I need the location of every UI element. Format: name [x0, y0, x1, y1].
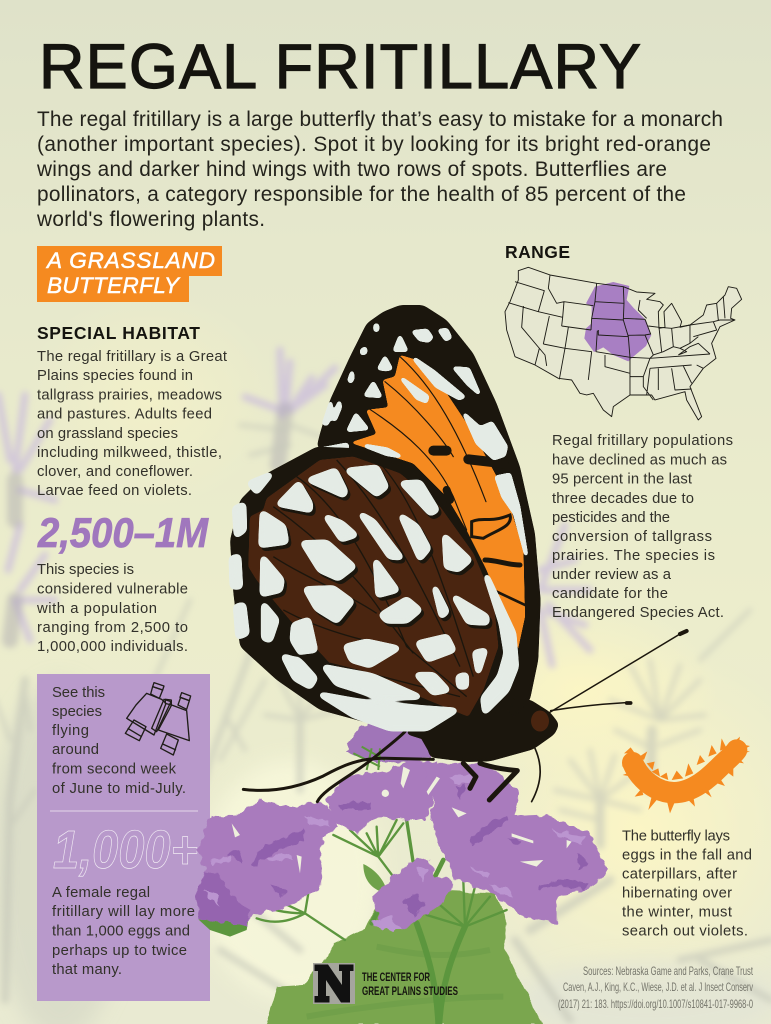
caterpillar text: [622, 828, 752, 940]
population text: This species is: [37, 562, 134, 578]
range decline text: candidate for the: [552, 586, 668, 602]
text: see this species: around: [52, 742, 99, 758]
flower: centre cluster: [327, 760, 437, 833]
hindwing veins: [273, 460, 473, 697]
caterpillar text: search out violets.: [622, 924, 748, 940]
map: US range: [505, 267, 742, 420]
heading: a grassland butterfly: A GRASSLAND: [45, 248, 215, 273]
leaf: [266, 892, 543, 1024]
range decline text: Regal fritillary populations: [552, 433, 733, 449]
icon: caterpillar: [622, 737, 750, 813]
butterfly eye: [531, 710, 549, 732]
special habitat text block: on grassland species: [37, 426, 178, 442]
special habitat text block: tallgrass prairies, meadows: [37, 388, 222, 404]
range decline text: 95 percent in the last: [552, 472, 692, 488]
intro text: The regal fritillary is a large butterfly that’s easy to mistake for a monarch: [37, 108, 723, 131]
flower: left cluster: [195, 800, 338, 925]
population text: 1,000,000 individuals.: [37, 639, 188, 655]
icon: binoculars: [125, 683, 191, 755]
text: female eggs: [52, 885, 195, 978]
text: female eggs: fritillary will lay more: [52, 904, 195, 920]
range decline text: have declined as much as: [552, 452, 727, 468]
butterfly body: [403, 699, 559, 762]
panel: sighting and eggs: [37, 674, 210, 1001]
stems: [257, 820, 507, 1024]
text: see this species: of June to mid-July.: [52, 781, 186, 797]
forewing spots: [322, 325, 526, 554]
population text: with a population: [36, 601, 157, 617]
range decline text: conversion of tallgrass: [552, 529, 712, 545]
range decline text: [552, 433, 733, 621]
title: REGAL FRITILLARY: [39, 32, 641, 102]
text: female eggs: perhaps up to twice: [52, 943, 187, 959]
caterpillar text: hibernating over: [622, 886, 732, 902]
hindwing brown: [248, 457, 498, 717]
text: see this species: [52, 685, 186, 797]
range decline text: Endangered Species Act.: [552, 605, 724, 621]
sources: [558, 964, 753, 1011]
flower: top behind cluster: [345, 713, 430, 763]
caterpillar text: The butterfly lays: [622, 828, 730, 844]
intro text: wings and darker hind wings with two rows of spots. Butterflies are: [36, 158, 667, 181]
stat: population 2,500-1M: 2,500–1M: [37, 509, 209, 556]
text: see this species: from second week: [52, 762, 177, 778]
special habitat text block: Plains species found in: [37, 368, 193, 384]
text: female eggs: than 1,000 eggs and: [52, 924, 190, 940]
logo: center name: THE CENTER FOR: [362, 972, 430, 984]
butterfly: [230, 305, 687, 802]
text: see this species: species: [52, 704, 102, 720]
flower: front small cluster: [372, 857, 453, 930]
special habitat text block: The regal fritillary is a Great: [37, 349, 227, 365]
heading: a grassland butterfly: BUTTERFLY: [47, 273, 181, 298]
plant: leaf, stems and flowers: [195, 713, 608, 1024]
stat: 1,000+ outlined: 1,000+: [53, 820, 198, 880]
logo: center name: [362, 972, 458, 998]
intro text: world's flowering plants.: [36, 208, 265, 231]
text: female eggs: A female regal: [52, 885, 150, 901]
intro text: pollinators, a category responsible for the health of 85 percent of the: [37, 183, 686, 206]
heading: a grassland butterfly: [37, 246, 222, 302]
text: see this species: flying: [52, 723, 89, 739]
special habitat text block: and pastures. Adults feed: [37, 406, 212, 422]
caterpillar text: the winter, must: [622, 904, 732, 920]
heading: range: RANGE: [505, 242, 570, 262]
wings: [230, 305, 541, 730]
intro text: (another important species). Spot it by looking for its bright red-orange: [37, 133, 711, 156]
population text: ranging from 2,500 to: [37, 620, 188, 636]
population text: considered vulnerable: [37, 582, 188, 598]
forewing black markings: [368, 357, 525, 605]
flower: pale gaps: [232, 767, 572, 873]
special habitat text block: SPECIAL HABITAT: [37, 323, 200, 343]
population text: [36, 562, 188, 655]
special habitat text block: [37, 323, 227, 499]
butterfly legs and proboscis: [243, 727, 540, 802]
flower: right cluster: [423, 763, 608, 923]
forewing orange: [350, 355, 525, 655]
text: see this species: See this: [52, 685, 105, 701]
range decline text: three decades due to: [552, 491, 694, 507]
special habitat text block: Larvae feed on violets.: [37, 483, 192, 499]
caterpillar text: eggs in the fall and: [622, 848, 752, 864]
range shading: [584, 282, 651, 361]
intro text: [36, 108, 723, 231]
range decline text: prairies. The species is: [552, 548, 715, 564]
range decline text: pesticides and the: [552, 510, 670, 526]
forewing: [317, 305, 541, 720]
caterpillar text: caterpillars, after: [622, 866, 737, 882]
hindwing spot shadows: [264, 471, 489, 626]
special habitat text block: including milkweed, thistle,: [37, 445, 222, 461]
text: female eggs: that many.: [52, 962, 122, 978]
antennae: [549, 631, 687, 713]
hindwing spots: [232, 468, 516, 728]
special habitat text block: clover, and coneflower.: [37, 464, 193, 480]
range decline text: under review as a: [552, 567, 672, 583]
logo: center name: GREAT PLAINS STUDIES: [362, 986, 458, 998]
logo: N mark: [313, 963, 355, 1004]
hindwing: [230, 447, 522, 730]
